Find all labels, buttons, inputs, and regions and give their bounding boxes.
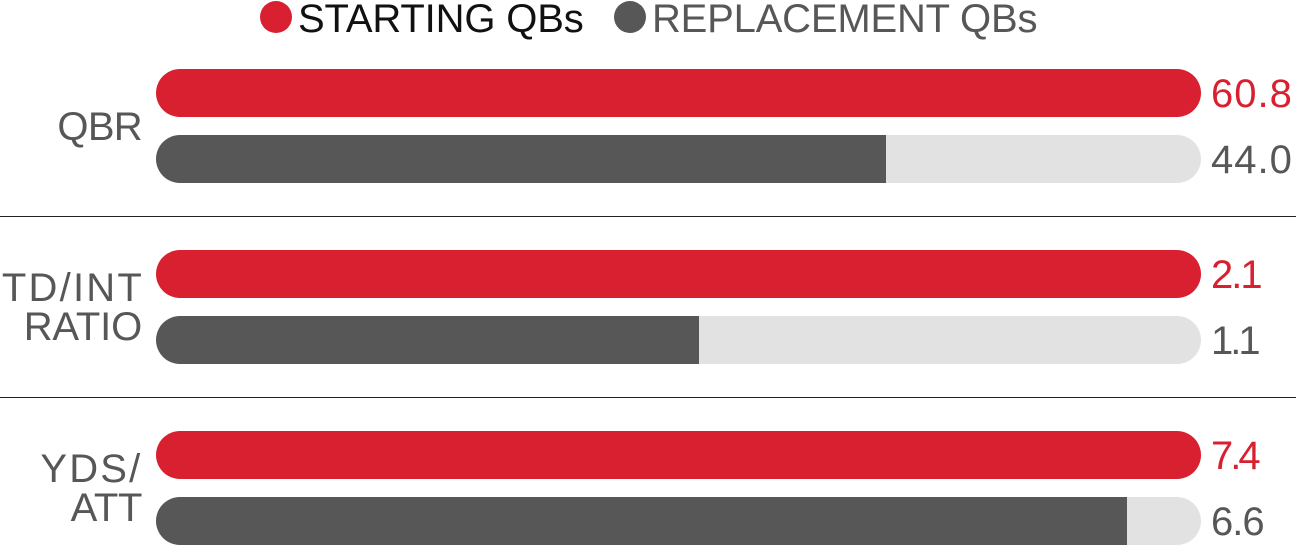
legend dot: replacement QBs bbox=[614, 1, 646, 33]
legend dot: starting QBs bbox=[260, 1, 292, 33]
value: TD/INT replacement: 1.1 bbox=[1211, 319, 1258, 363]
bar: TD/INT starting bbox=[156, 250, 1201, 298]
row label: TD/INT ratio bbox=[2, 266, 144, 349]
value: QBR replacement: 44.0 bbox=[1211, 138, 1293, 182]
bar: TD/INT replacement bbox=[156, 316, 1201, 364]
legend bbox=[260, 0, 1037, 41]
value: TD/INT starting: 2.1 bbox=[1211, 253, 1261, 297]
row label: TD/INT ratio: TD/INT bbox=[2, 266, 144, 310]
value: YDS/ATT starting: 7.4 bbox=[1211, 434, 1258, 478]
bar: QBR replacement bbox=[156, 135, 1201, 183]
bar: YDS/ATT starting bbox=[156, 431, 1201, 479]
value: YDS/ATT replacement: 6.6 bbox=[1211, 500, 1264, 544]
bar: YDS/ATT replacement bbox=[156, 497, 1201, 545]
row label: YDS/ATT: YDS/ bbox=[40, 447, 142, 491]
row label: QBR: QBR bbox=[57, 105, 142, 149]
bar: QBR starting bbox=[156, 69, 1201, 117]
row label: TD/INT ratio: RATIO bbox=[24, 305, 142, 349]
row label: YDS/ATT bbox=[40, 447, 142, 530]
value: QBR starting: 60.8 bbox=[1211, 72, 1293, 116]
row label: YDS/ATT: ATT bbox=[71, 486, 142, 530]
